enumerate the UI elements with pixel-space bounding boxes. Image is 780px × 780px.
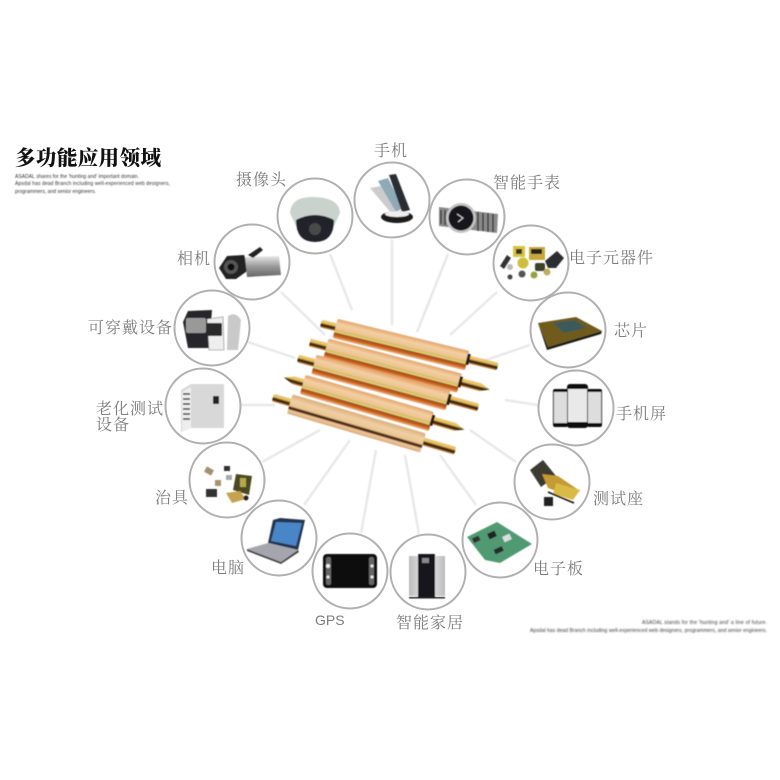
node: 可穿戴设备 (88, 290, 250, 366)
icon: phone screens (553, 384, 602, 428)
pin 4 (281, 369, 467, 441)
icon: electronic components (500, 246, 564, 280)
node: GPS (312, 534, 388, 628)
label: 智能手表 (493, 173, 561, 192)
icon: GPS device (323, 554, 377, 588)
label: 可穿戴设备 (88, 319, 173, 337)
label: 智能家居 (396, 614, 464, 632)
label: 设备 (96, 416, 130, 434)
node: 智能手表 (430, 173, 561, 254)
icon: dome camera (290, 197, 340, 242)
node: 芯片 (530, 292, 648, 368)
label: 电子板 (533, 560, 584, 578)
icon: camcorder (219, 247, 281, 279)
footer text block (530, 620, 767, 634)
icon: chip (538, 317, 602, 350)
intro text block (15, 174, 170, 195)
connector lines (241, 240, 538, 534)
node: 电子板 (462, 502, 584, 578)
pin 1 (318, 315, 500, 378)
icon: fixtures (204, 466, 252, 503)
label (96, 400, 164, 434)
label: 摄像头 (236, 171, 287, 189)
intro text block: ASADAL shares for the 'hunting and' important domain. (15, 174, 139, 180)
node: 老化测试设备 (96, 368, 240, 444)
footer text block: ASADAL stands for the 'hunting and' a line of future. (642, 620, 767, 626)
node: 摄像头 (236, 171, 352, 254)
node: 手机屏 (538, 370, 667, 446)
label: 治具 (155, 489, 189, 507)
label: 手机屏 (616, 405, 667, 423)
icon: wearable bands (183, 310, 241, 350)
title: 多功能应用领域 (15, 146, 162, 170)
icon: flip phone fan (370, 174, 413, 223)
footer text block: Apsdal has dead Branch including well-experienced web designers, programmers, and senior engineers. (530, 628, 767, 634)
label: 相机 (177, 250, 211, 268)
label: 电脑 (211, 559, 245, 577)
label: 芯片 (614, 322, 648, 340)
icon: aging chamber (181, 384, 224, 432)
intro text block: Apsdal has dead Branch including well-experienced web designers, (15, 181, 170, 187)
intro text block: programmers, and senior engineers. (15, 189, 96, 195)
pin 2 (307, 334, 492, 401)
icon: laptop (247, 518, 305, 564)
node: 智能家居 (390, 534, 466, 632)
label: 老化测试 (96, 400, 164, 418)
label: 电子元器件 (569, 249, 654, 267)
node: 相机 (177, 224, 290, 300)
icon: test socket (530, 460, 580, 506)
pin 5 (270, 389, 458, 462)
node: 手机 (354, 142, 430, 238)
node: 电脑 (211, 500, 316, 577)
pin bundle (270, 315, 500, 462)
node: 测试座 (514, 444, 644, 520)
icon: circuit board (467, 522, 532, 563)
node: 电子元器件 (494, 226, 654, 300)
label: 测试座 (593, 490, 644, 508)
icon: wrist watch (439, 203, 498, 233)
label: GPS (315, 612, 345, 628)
label: 手机 (374, 142, 408, 160)
icon: smart home device (409, 554, 445, 598)
node: 治具 (155, 442, 264, 518)
pin 3 (295, 350, 481, 419)
